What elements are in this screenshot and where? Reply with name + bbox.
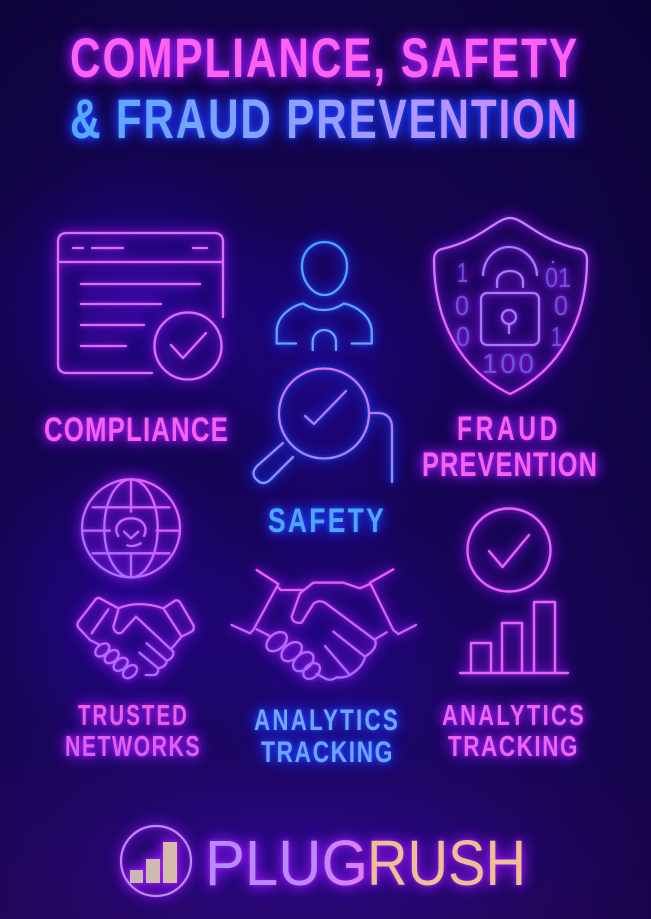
icon: shield with padlock and binary digits: 01 [545, 262, 571, 293]
label: tracking: TRACKING [448, 731, 579, 763]
icon: person [277, 242, 372, 350]
icon: shield with padlock and binary digits: 0 [456, 321, 470, 352]
panel: safety [254, 242, 392, 540]
icon: small handshake [77, 598, 194, 681]
label: tracking: TRACKING [261, 736, 394, 769]
label: safety: SAFETY [268, 502, 386, 540]
icon: shield with padlock and binary digits: 0 [554, 290, 568, 321]
label: networks: NETWORKS [65, 731, 201, 763]
panel: analytics tracking right [442, 508, 586, 763]
label: analytics: ANALYTICS [254, 704, 400, 737]
label: trusted: TRUSTED [78, 700, 189, 732]
label: fraud: FRAUD [457, 410, 561, 448]
label: compliance: COMPLIANCE [44, 411, 229, 449]
logo wordmark: RUSH [367, 827, 526, 899]
logo: PlugRush [121, 826, 526, 899]
logo wordmark [205, 827, 526, 899]
icon: shield with padlock and binary digits: 1 [551, 321, 562, 352]
label: prevention: PREVENTION [422, 446, 598, 484]
panel: compliance [44, 233, 229, 449]
title [70, 26, 579, 150]
icon: shield with padlock and binary digits: 0 [455, 290, 469, 321]
panel: fraud prevention [422, 218, 598, 484]
icon: large handshake [232, 569, 416, 682]
panel: analytics tracking centre [232, 569, 416, 769]
label: analytics: ANALYTICS [442, 700, 586, 732]
icon: shield with padlock and binary digits [434, 218, 587, 394]
icon: browser window with check [58, 233, 223, 380]
icon: shield with padlock and binary digits: 1 [457, 257, 468, 288]
logo wordmark: PLUG [205, 827, 368, 899]
icon: magnifier with check [254, 368, 392, 483]
logo icon [121, 826, 191, 896]
icon: bar chart [460, 602, 568, 673]
icon: check circle [468, 508, 550, 592]
panel: trusted networks [65, 479, 201, 763]
icon: shield with padlock and binary digits: 100 [482, 348, 534, 379]
icon: globe [82, 479, 180, 577]
